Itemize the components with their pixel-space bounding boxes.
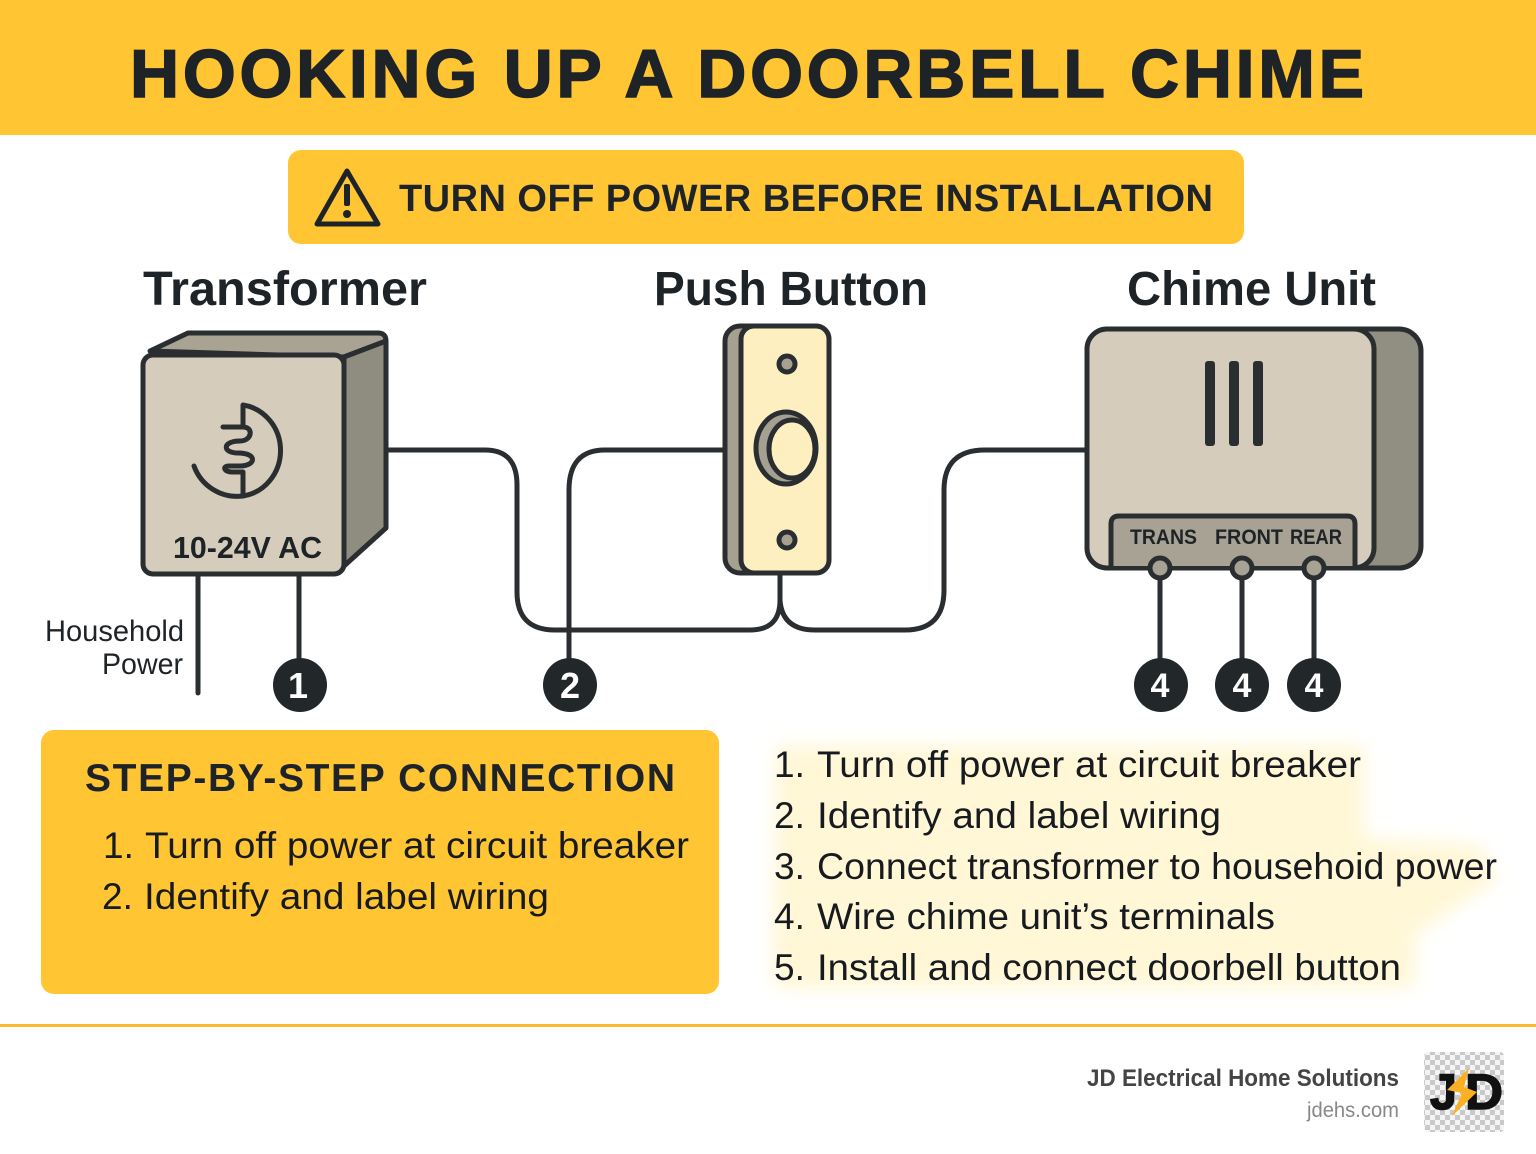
title banner xyxy=(0,0,1536,135)
terminal labels: FRONT xyxy=(1215,526,1283,549)
household power label: Power xyxy=(102,648,183,681)
panel: step-by-step connection xyxy=(41,730,719,994)
chime unit xyxy=(1087,329,1421,578)
transformer xyxy=(143,333,386,574)
list step 5: Install and connect doorbell button xyxy=(817,947,1401,988)
chime side xyxy=(1087,329,1421,568)
badge 4 rear xyxy=(1287,658,1341,712)
panel heading: STEP-BY-STEP CONNECTION xyxy=(85,757,675,800)
list step 4: 4. xyxy=(774,896,805,937)
chime vents xyxy=(1205,361,1263,446)
icon: transformer coil xyxy=(194,405,281,496)
terminal labels xyxy=(1130,526,1342,549)
push button xyxy=(725,326,829,573)
transformer front face xyxy=(143,355,344,574)
list step 2: Identify and label wiring xyxy=(817,795,1221,836)
logo: JD: J xyxy=(1430,1064,1457,1120)
list step 1: Turn off power at circuit breaker xyxy=(817,744,1361,785)
heading: transformer: Transformer xyxy=(143,263,427,316)
warning banner xyxy=(288,150,1244,244)
highlight glow xyxy=(773,746,1497,988)
title: HOOKING UP A DOORBELL CHIME xyxy=(130,36,1364,112)
badge 4 trans: 4 xyxy=(1151,667,1170,705)
badge 4 rear: 4 xyxy=(1305,667,1324,705)
full steps list xyxy=(773,744,1497,988)
step 1: Turn off power at circuit breaker xyxy=(145,825,689,866)
step 2: 2. xyxy=(102,876,133,917)
list step 3: 3. xyxy=(774,846,805,887)
badge 2: 2 xyxy=(560,665,580,706)
logo: JD xyxy=(1424,1052,1504,1132)
step 1: 1. xyxy=(103,825,134,866)
terminal panel xyxy=(1111,516,1355,566)
badge 1 xyxy=(273,658,327,712)
voltage label: 10-24V AC xyxy=(173,530,322,565)
button press xyxy=(769,420,815,478)
bottom screw xyxy=(779,532,795,548)
badge 4 front: 4 xyxy=(1233,667,1252,705)
list step 2: 2. xyxy=(774,795,805,836)
button front plate xyxy=(741,326,829,573)
icon: warning triangle xyxy=(317,171,378,224)
terminal labels: TRANS xyxy=(1130,526,1197,549)
badge 4 front xyxy=(1215,658,1269,712)
list step 5: 5. xyxy=(774,947,805,988)
heading: chime unit: Chime Unit xyxy=(1127,263,1376,316)
terminal screws xyxy=(1150,558,1324,578)
household power label xyxy=(45,615,184,681)
step 2: Identify and label wiring xyxy=(144,876,549,917)
footer brand name: JD Electrical Home Solutions xyxy=(1087,1065,1399,1092)
button back plate xyxy=(725,326,829,573)
transformer side face xyxy=(344,341,386,566)
list step 4: Wire chime unit’s terminals xyxy=(817,896,1275,937)
terminal labels: REAR xyxy=(1290,526,1342,549)
heading: push button: Push Button xyxy=(654,263,928,316)
household power label: Household xyxy=(45,615,184,648)
wiring xyxy=(198,450,1314,693)
transformer top face xyxy=(150,333,386,357)
top screw xyxy=(779,356,795,372)
list step 1: 1. xyxy=(774,744,805,785)
button bezel xyxy=(756,412,816,484)
warning text: TURN OFF POWER BEFORE INSTALLATION xyxy=(399,178,1213,220)
badge 4 trans xyxy=(1134,658,1188,712)
list step 3: Connect transformer to househoid power xyxy=(817,846,1497,887)
badge 1: 1 xyxy=(288,665,308,706)
footer url: jdehs.com xyxy=(1306,1099,1399,1122)
logo: JD: D xyxy=(1465,1064,1503,1120)
chime front xyxy=(1087,329,1374,568)
badge 2 xyxy=(543,658,597,712)
